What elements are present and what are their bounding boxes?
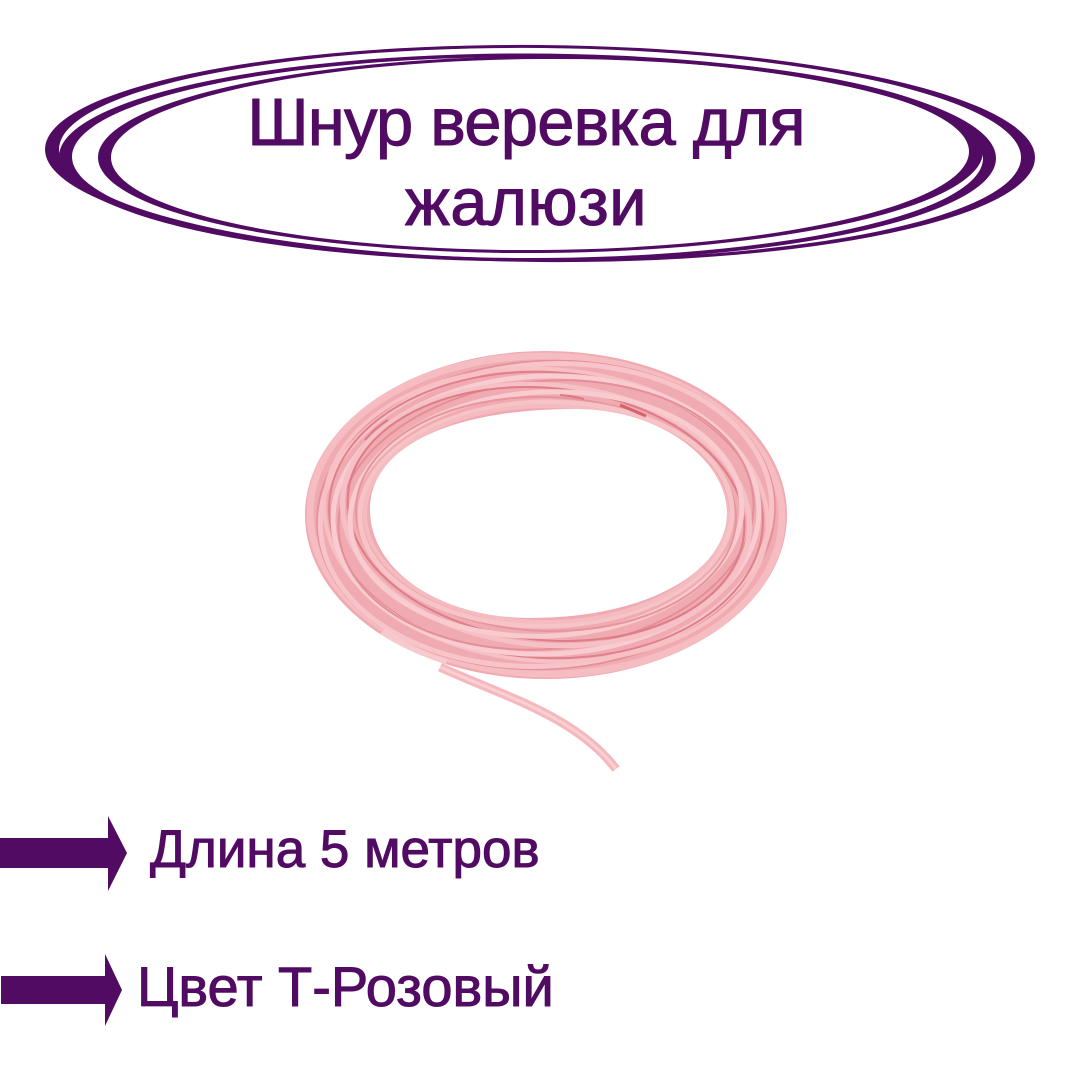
title: Шнур веревка для [247, 85, 805, 160]
loose cord end [440, 667, 616, 769]
title [247, 85, 805, 240]
arrow 2 [1, 954, 122, 1026]
text: length: Длина 5 метров [150, 820, 540, 879]
title: жалюзи [405, 165, 647, 240]
arrow 1 [0, 816, 127, 891]
product image: pink cord coil [305, 351, 787, 772]
text: colour: Цвет Т-Розовый [137, 955, 554, 1018]
decorative oval frame [45, 44, 1035, 262]
coil strands [300, 345, 792, 685]
